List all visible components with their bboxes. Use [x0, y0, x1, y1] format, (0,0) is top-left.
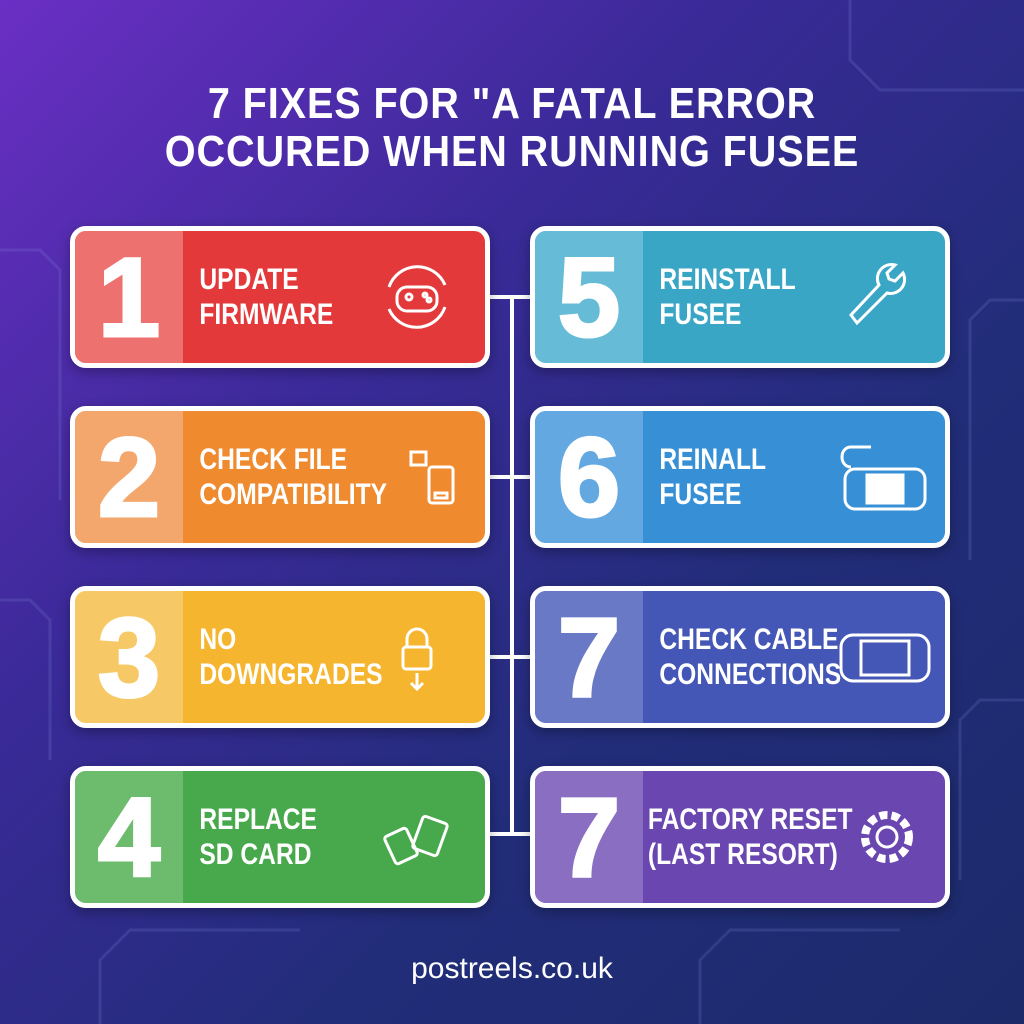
card 5: REINSTALL — [659, 263, 796, 296]
card 2: CHECK FILE — [199, 443, 347, 476]
icon: console — [840, 634, 930, 682]
card 5: FUSEE — [659, 298, 741, 331]
card 2: 2 — [98, 414, 160, 540]
card 3: 3 — [98, 594, 160, 720]
card 5: 5 — [558, 234, 620, 360]
icon: gear — [861, 811, 913, 863]
title: 7 FIXES FOR "A FATAL ERROR — [208, 79, 816, 128]
footer: postreels.co.uk — [411, 952, 613, 985]
icon: switch — [840, 446, 926, 510]
card 4 — [70, 766, 490, 908]
card 2: COMPATIBILITY — [199, 478, 387, 511]
icon: controller refresh — [388, 265, 446, 329]
card 8: 7 — [558, 774, 620, 900]
icon: wrench — [849, 263, 906, 326]
card 6: FUSEE — [659, 478, 741, 511]
card 1: 1 — [98, 234, 160, 360]
card 2 — [70, 406, 490, 548]
card 7: 7 — [558, 594, 620, 720]
card 3 — [70, 586, 490, 728]
card 1 — [70, 226, 490, 368]
card 7: CHECK CABLE — [659, 623, 838, 656]
title: OCCURED WHEN RUNNING FUSEE — [165, 127, 859, 176]
card 6: 6 — [558, 414, 620, 540]
card 1: UPDATE — [199, 263, 299, 296]
card 4: SD CARD — [199, 838, 311, 871]
icon: sd cards — [383, 814, 449, 866]
card 8 — [530, 766, 950, 908]
card 8: (LAST RESORT) — [648, 838, 838, 871]
title — [165, 79, 859, 176]
card 4: REPLACE — [199, 803, 317, 836]
card 3: NO — [199, 623, 236, 656]
icon: puzzle sd — [410, 450, 454, 504]
card 7: CONNECTIONS — [659, 658, 841, 691]
card 3: DOWNGRADES — [199, 658, 383, 691]
card 4: 4 — [98, 774, 160, 900]
card 1: FIRMWARE — [199, 298, 333, 331]
connector lines — [490, 295, 530, 836]
card 6 — [530, 406, 950, 548]
card 8: FACTORY RESET — [648, 803, 853, 836]
card 5 — [530, 226, 950, 368]
icon: lock down — [402, 628, 432, 691]
card 6: REINALL — [659, 443, 766, 476]
card 7 — [530, 586, 950, 728]
